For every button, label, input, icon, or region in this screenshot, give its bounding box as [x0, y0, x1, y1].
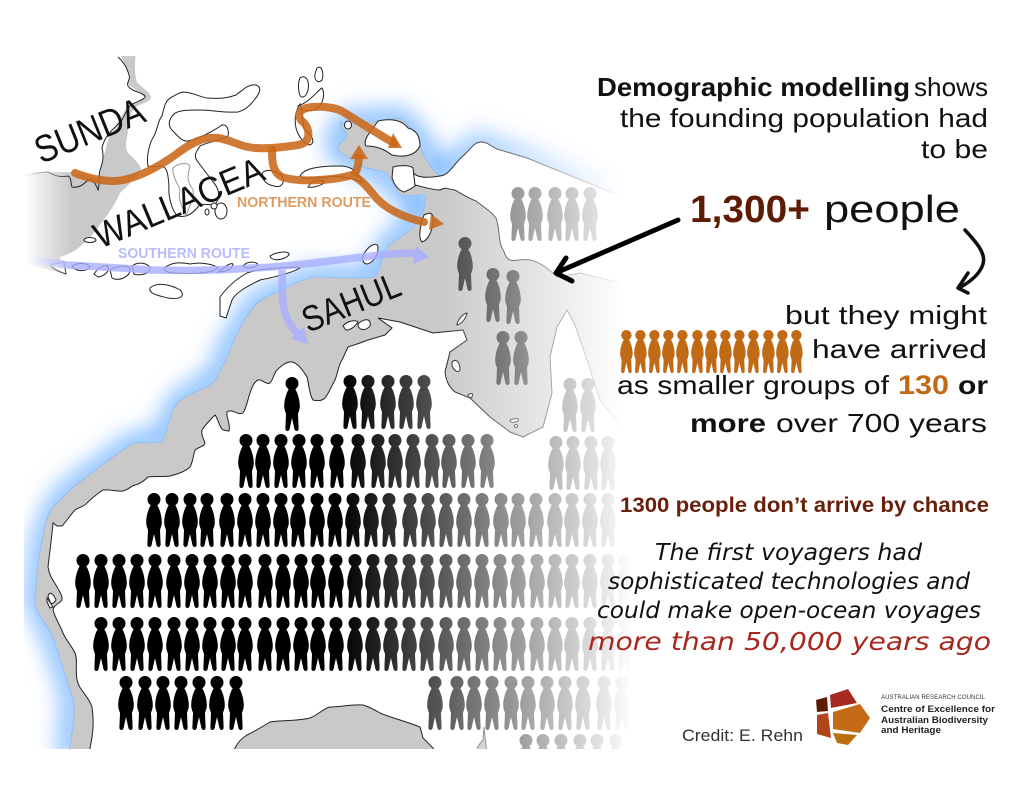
text: smaller groups: as smaller groups of — [617, 370, 890, 400]
population of 1,300 figures — [75, 187, 633, 788]
text: but they might have arrived: but they might — [785, 300, 988, 330]
small group of 13 orange figures — [620, 330, 803, 373]
arrowheads — [291, 246, 429, 344]
logo text: Centre of Excellence for — [881, 704, 995, 715]
land fade to the left — [24, 172, 70, 274]
big number: 1,300+ people — [690, 189, 960, 231]
text: but they might have arrived: have arrived — [812, 334, 987, 364]
Sunda shelf — [31, 56, 151, 274]
partial row cut at the frame — [520, 734, 622, 749]
text: smaller groups — [617, 370, 988, 438]
credit: Credit: E. Rehn — [682, 726, 803, 745]
subheading: 1300 people don’t arrive by chance — [620, 494, 989, 517]
handwritten text block: could make open-ocean voyages — [597, 598, 981, 624]
route label: southern: SOUTHERN ROUTE — [118, 246, 250, 262]
big number: 1,300+ people: people — [824, 189, 960, 231]
northern route — [75, 107, 444, 230]
logo text — [881, 695, 995, 736]
logo text: AUSTRALIAN RESEARCH COUNCIL — [881, 695, 986, 701]
text: smaller groups: more — [690, 408, 766, 438]
Sunda coastline — [20, 57, 145, 190]
Sulawesi and Wallacea islands — [147, 85, 260, 217]
text: smaller groups: or — [958, 370, 988, 400]
arrow pointing to the map — [556, 220, 678, 281]
logo text: and Heritage — [881, 725, 941, 736]
arrowheads — [350, 133, 444, 230]
Great Australian Bight shelf — [234, 704, 434, 749]
modern New Guinea — [414, 142, 618, 282]
handwritten text block: The first voyagers had — [655, 540, 922, 566]
route label: northern: NORTHERN ROUTE — [237, 195, 371, 211]
Spencer Gulf shelf — [476, 727, 487, 749]
logo mark — [816, 689, 870, 745]
southern route — [35, 246, 429, 344]
ocean glow around Sahul — [35, 118, 680, 760]
region label: SAHUL: SAHUL — [296, 264, 406, 340]
headline text: Demographic modelling — [597, 72, 910, 102]
text: smaller groups: over 700 years — [776, 408, 987, 438]
modern Australia — [48, 309, 616, 749]
region label: SUNDA: SUNDA — [29, 90, 152, 172]
headline text — [597, 72, 988, 164]
headline text: the founding population had — [620, 103, 988, 133]
curved arrow — [958, 230, 984, 293]
handwritten text block: more than 50,000 years ago — [588, 627, 991, 656]
headline text: to be — [921, 134, 988, 164]
logo text: Australian Biodiversity — [881, 715, 989, 726]
handwritten text block: sophisticated technologies and — [608, 569, 970, 595]
region label: WALLACEA: WALLACEA — [87, 149, 270, 256]
figures on Queensland — [562, 378, 578, 432]
handwritten text block — [588, 540, 991, 656]
text: smaller groups: 130 — [898, 370, 949, 400]
small islands — [47, 67, 519, 608]
figures on New Guinea — [457, 237, 473, 291]
headline text: shows — [914, 72, 988, 102]
map background — [24, 56, 618, 749]
big number: 1,300+ people: 1,300+ — [690, 189, 810, 231]
land fade to the right — [447, 128, 625, 749]
Sahul shelf — [34, 118, 598, 749]
text: but they might have arrived — [785, 300, 988, 364]
